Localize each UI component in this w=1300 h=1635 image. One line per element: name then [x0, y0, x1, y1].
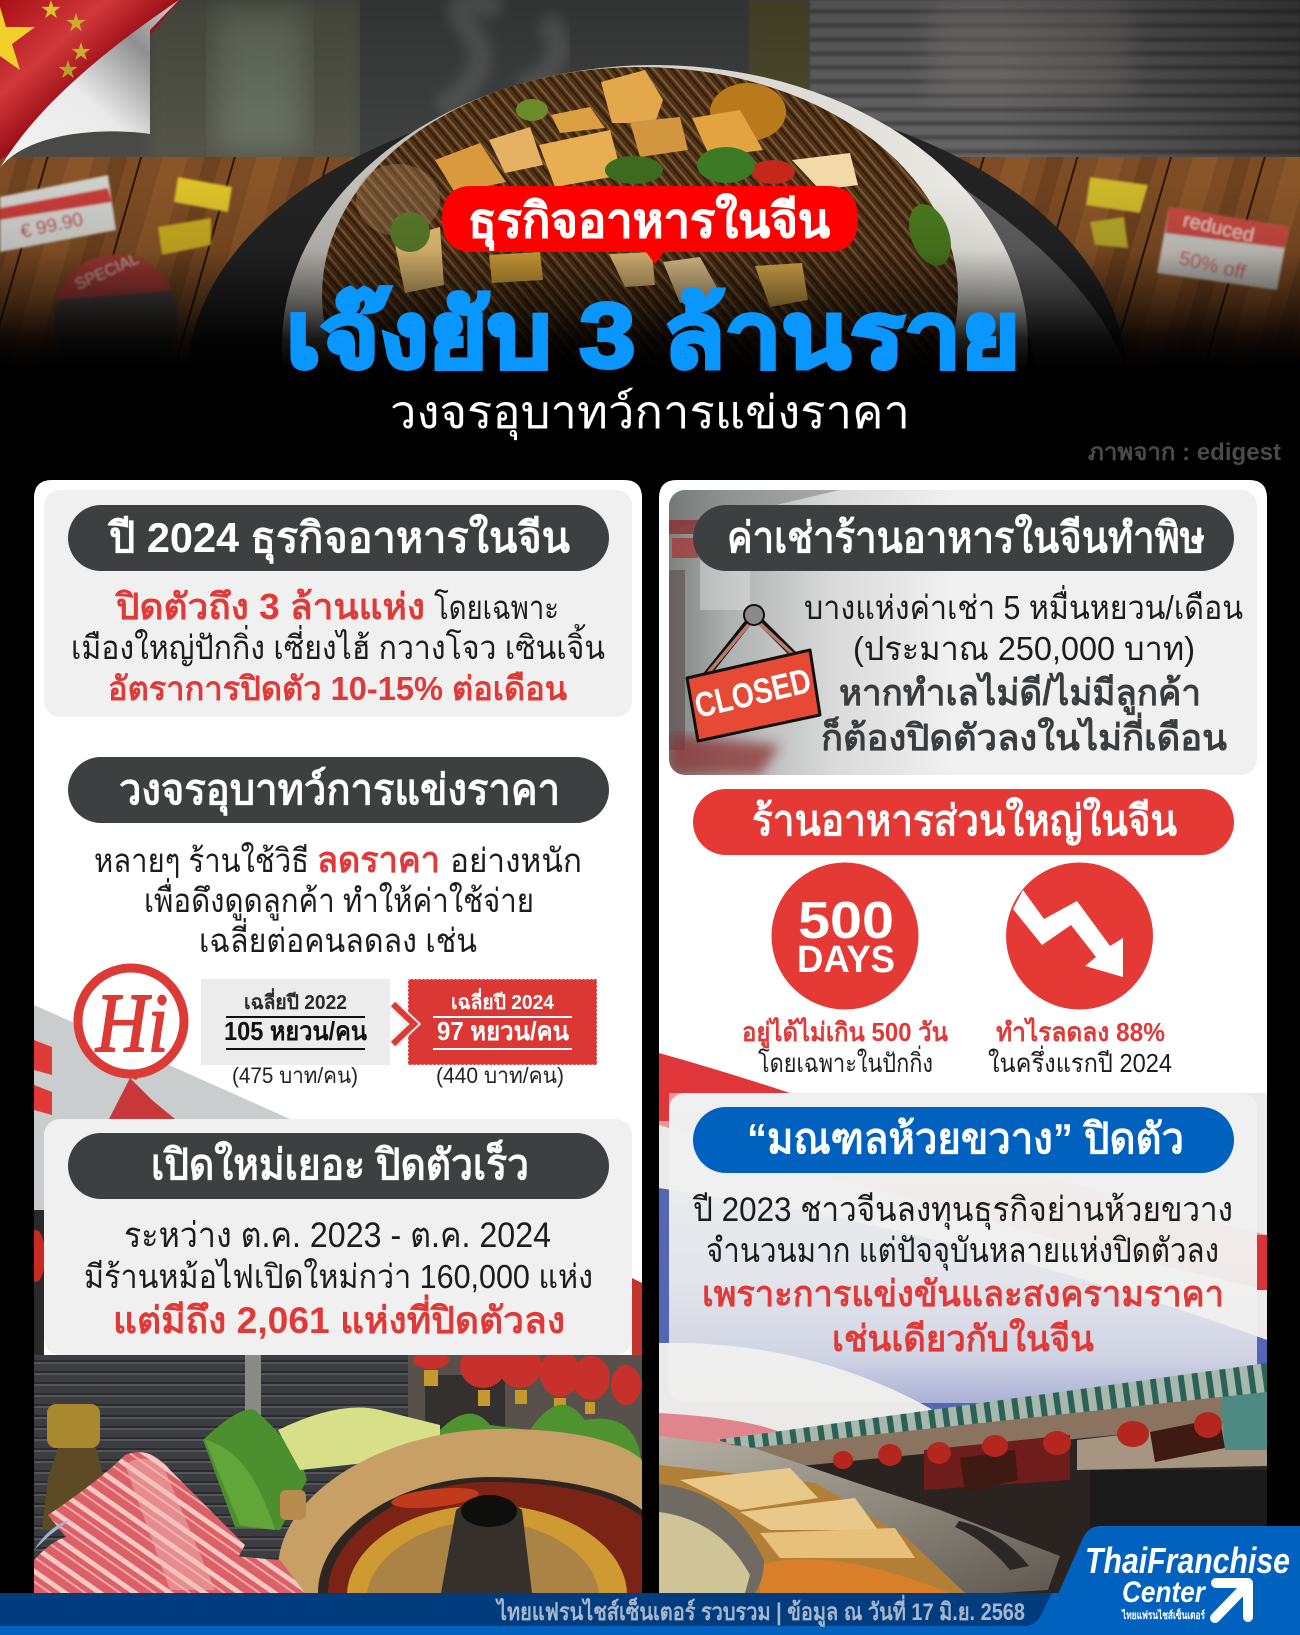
- ticket: 2024 price: เฉลี่ยปี 2024: [451, 987, 555, 1014]
- photo: restaurant facade: [27, 1005, 642, 1355]
- text block: เพื่อดึงดูดลูกค้า ทำให้ค่าใช้จ่าย: [144, 878, 534, 921]
- panel: right column: [659, 480, 1267, 1593]
- text block: จำนวนมาก แต่ปัจจุบันหลายแห่งปิดตัวลง: [706, 1232, 1219, 1271]
- text block: เมืองใหญ่ปักกิ่ง เซี่ยงไฮ้ กวางโจว เซินเจิ้น: [71, 624, 605, 666]
- panel: left column: [27, 480, 642, 1593]
- heading pill: [693, 1107, 1234, 1173]
- text block: ลดราคา: [317, 839, 440, 880]
- stat: 500 days: 500: [798, 892, 894, 950]
- leafy greens: [203, 1405, 642, 1530]
- text block: เพราะการแข่งขันและสงครามราคา: [702, 1273, 1224, 1314]
- stat: profit down: ทำไรลดลง 88%: [996, 1016, 1165, 1047]
- footer bar: ไทยแฟรนไชส์เซ็นเตอร์ รวบรวม | ข้อมูล ณ วันที่ 17 มิ.ย. 2568: [495, 1594, 1025, 1627]
- price tags: 50% off: [1177, 247, 1248, 284]
- text block: [804, 585, 1243, 758]
- steel hotpot: [659, 1436, 1060, 1593]
- icon: closed sign: [687, 605, 820, 741]
- heading pill: วงจรอุบาทว์การแข่งราคา: [119, 766, 560, 816]
- photo credit: ภาพจาก : edigest: [1088, 439, 1281, 466]
- subtitle: วงจรอุบาทว์การแข่งราคา: [390, 386, 910, 441]
- ticket: 2022 price: 105 หยวน/คน: [224, 1016, 367, 1046]
- price tags: SPECIAL: [73, 251, 141, 294]
- pot and plate: [187, 90, 1127, 670]
- text block: โดยเฉพาะ: [434, 589, 559, 626]
- panel: many open many close: [44, 1119, 632, 1355]
- ticket: 2024 price: [408, 979, 597, 1088]
- text block: [692, 1191, 1233, 1359]
- ticket: 2022 price: [201, 979, 390, 1088]
- text block: ปี 2023 ชาวจีนลงทุนธุรกิจย่านห้วยขวาง: [692, 1191, 1233, 1230]
- text block: บางแห่งค่าเช่า 5 หมื่นหยวน/เดือน: [804, 585, 1243, 626]
- icon: Hi logo: [78, 968, 184, 1080]
- footer bar: [0, 1593, 1300, 1635]
- heading pill: [68, 505, 609, 571]
- ticket: 2024 price: (440 บาท/คน): [436, 1063, 564, 1088]
- logo: ThaiFranchise Center: Center: [1122, 1576, 1207, 1609]
- heading pill: [68, 757, 609, 823]
- text block: ระหว่าง ต.ค. 2023 - ต.ค. 2024: [124, 1216, 551, 1255]
- text block: (ประมาณ 250,000 บาท): [853, 630, 1195, 667]
- text block: มีร้านหม้อไฟเปิดใหม่กว่า 160,000 แห่ง: [84, 1258, 593, 1295]
- clay hotpot: [278, 1429, 642, 1593]
- stat: 500 days: อยู่ได้ไม่เกิน 500 วัน: [742, 1016, 948, 1049]
- badge: red speech tag: ธุรกิจอาหารในจีน: [468, 192, 830, 251]
- price tags: reduced: [1181, 209, 1256, 247]
- heading pill: เปิดใหม่เยอะ ปิดตัวเร็ว: [151, 1139, 529, 1188]
- stat: profit down: ในครึ่งแรกปี 2024: [988, 1045, 1172, 1078]
- sliced beef: [34, 1452, 305, 1593]
- heading pill: [693, 505, 1234, 571]
- stat: 500 days: DAYS: [797, 939, 895, 981]
- text block: หากทำเลไม่ดี/ไม่มีลูกค้า: [839, 671, 1201, 716]
- heading pill: “มณฑลห้วยขวาง” ปิดตัว: [747, 1115, 1184, 1162]
- ticket: 2024 price: 97 หยวน/คน: [437, 1016, 569, 1046]
- icon: Chinese flag page curl: [0, 0, 180, 168]
- text block: เช่นเดียวกับในจีน: [832, 1317, 1094, 1359]
- text block: [84, 1216, 593, 1341]
- heading pill: most restaurants: ร้านอาหารส่วนใหญ่ในจีน: [752, 796, 1177, 846]
- logo: ThaiFranchise Center: [1040, 1526, 1300, 1635]
- heading pill: [68, 1133, 609, 1199]
- stat: 500 days: โดยเฉพาะในปักกิ่ง: [758, 1045, 933, 1078]
- photo: Thai flag: [659, 1053, 1267, 1445]
- text block: [71, 586, 605, 707]
- icon: logo arrow: [1215, 1583, 1248, 1618]
- ticket: 2022 price: เฉลี่ยปี 2022: [244, 987, 347, 1014]
- text block: อัตราการปิดตัว 10-15% ต่อเดือน: [108, 670, 567, 707]
- panel: closures 2024: [44, 490, 632, 717]
- steam: [440, 2, 558, 110]
- stat: profit down: [988, 862, 1172, 1078]
- icon: Hi logo: Hi: [95, 977, 168, 1070]
- text block: ก็ต้องปิดตัวลงในไม่กี่เดือน: [821, 712, 1227, 758]
- tofu and vegetables: [390, 70, 959, 307]
- photo: Chinese restaurant and hotpot: [659, 1363, 1267, 1593]
- text block: เฉลี่ยต่อคนลดลง เช่น: [199, 918, 477, 959]
- text block: อย่างหนัก: [450, 842, 582, 879]
- bottle: [42, 1404, 108, 1530]
- title: เจ๊งยับ 3 ล้านราย: [286, 285, 1020, 387]
- panel: rent: [669, 490, 1257, 775]
- arrow: price falls: [393, 1004, 414, 1044]
- price tags: € 99.90: [19, 209, 85, 243]
- panel: Huai Khwang: [669, 1093, 1257, 1403]
- text block: หลายๆ ร้านใช้วิธี: [94, 842, 309, 879]
- badge: red speech tag: [442, 186, 858, 264]
- heading pill: ค่าเช่าร้านอาหารในจีนทำพิษ: [727, 513, 1205, 561]
- heading pill: ปี 2024 ธุรกิจอาหารในจีน: [108, 513, 570, 564]
- stat: 500 days: [742, 862, 948, 1078]
- text block: แต่มีถึง 2,061 แห่งที่ปิดตัวลง: [113, 1294, 565, 1341]
- ticket: 2022 price: (475 บาท/คน): [232, 1063, 358, 1088]
- heading pill: most restaurants: [693, 789, 1234, 855]
- panel: price war: [68, 757, 609, 1088]
- panel: shop shutters and hotpot photo: [34, 1344, 642, 1593]
- text block: ปิดตัวถึง 3 ล้านแห่ง: [114, 586, 425, 627]
- text block: [94, 839, 582, 959]
- icon: closed sign: CLOSED: [691, 661, 815, 726]
- price tags: [0, 175, 1289, 382]
- logo: ThaiFranchise Center: ไทยแฟรนไชส์เซ็นเตอร์: [1120, 1608, 1205, 1622]
